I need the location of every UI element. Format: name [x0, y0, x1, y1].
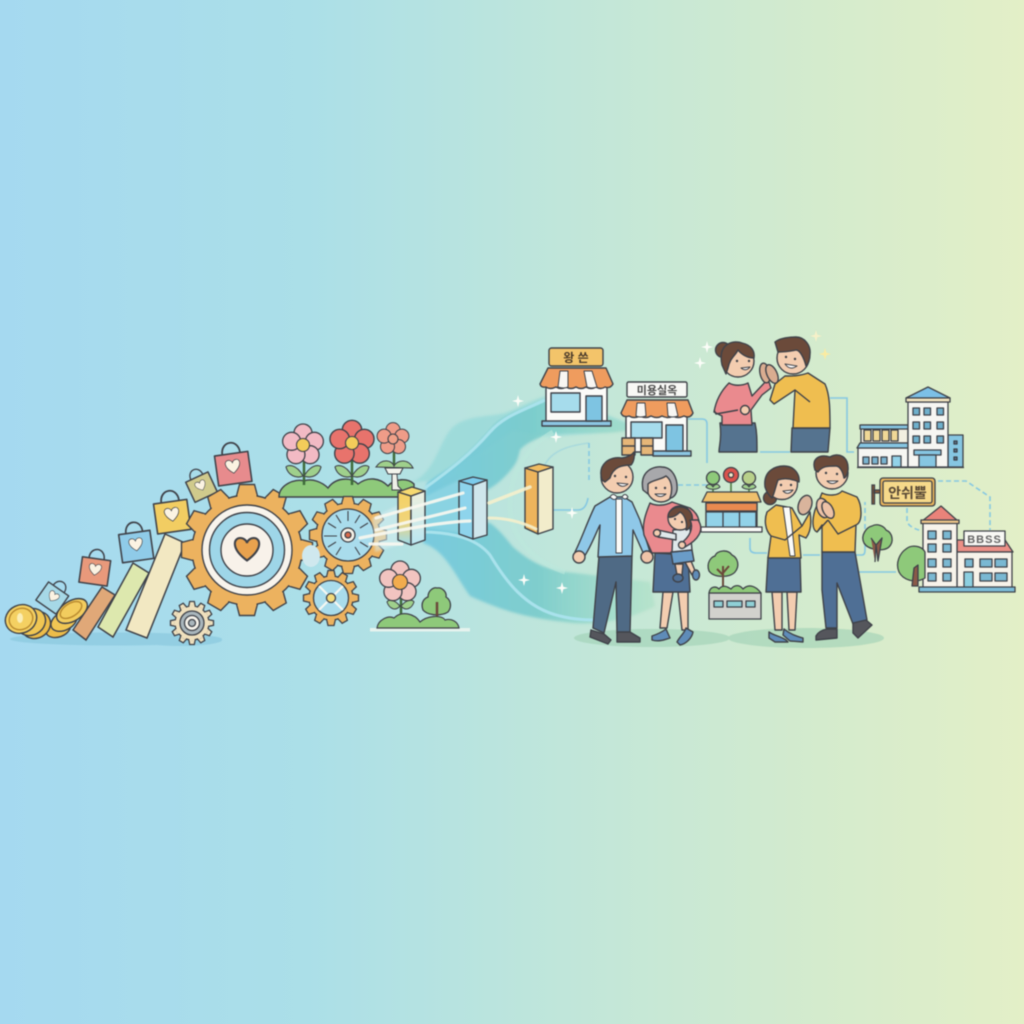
rising bars	[73, 534, 185, 640]
flower: red	[330, 420, 374, 485]
gear: medium spoked	[310, 496, 386, 574]
flower: pink	[283, 424, 323, 485]
shop 1 awning	[540, 368, 613, 388]
coins	[1, 594, 92, 644]
colleagues: woman in yellow jacket	[764, 466, 815, 642]
shopping bags	[36, 441, 252, 614]
light streaks through prisms	[360, 487, 536, 544]
light wash over gear edge	[372, 505, 398, 552]
gear: small	[304, 570, 358, 626]
bag: salmon	[79, 548, 112, 586]
flow: ribbons between gears and community	[413, 396, 655, 623]
building: red roof complex	[919, 506, 1015, 592]
child	[654, 506, 700, 582]
flower shop	[701, 468, 762, 532]
bag: blue small	[36, 575, 73, 614]
flower bed with three flowers	[279, 420, 414, 497]
trees by buildings	[863, 525, 925, 586]
shop 2 awning	[621, 400, 693, 418]
family ground shadows	[574, 628, 884, 648]
couple: high-five woman	[714, 342, 771, 452]
tree 1	[863, 525, 892, 562]
artwork	[1, 330, 1015, 648]
tree 2	[898, 546, 925, 586]
building sign: BBSS	[967, 534, 1002, 546]
connector lines	[540, 398, 990, 572]
gear: tiny beige	[170, 602, 214, 644]
bag: yellow	[152, 489, 191, 534]
ground shadows	[10, 632, 222, 646]
bag: blue	[117, 520, 154, 563]
hanging sign	[872, 478, 935, 506]
flower and tree on lower hill	[370, 561, 470, 632]
family: father	[573, 452, 653, 644]
clapped hands	[758, 362, 781, 385]
shop 1	[540, 348, 613, 426]
prism: orange	[525, 464, 553, 534]
flower: potted salmon	[376, 423, 413, 490]
gear: large with heart	[182, 484, 312, 616]
shop 2 sign: 미용실옥	[637, 384, 677, 397]
shop 2	[621, 382, 693, 456]
family: grandmother holding child	[642, 467, 701, 645]
hanging sign: 안쉬뿔	[888, 485, 927, 501]
pale blob at gear contact	[302, 545, 320, 567]
planter tree on building	[708, 551, 761, 619]
colleagues: man in yellow sweater	[813, 455, 872, 640]
building: blue roof complex	[857, 387, 964, 468]
bag: olive	[182, 465, 217, 502]
bag: red	[213, 441, 252, 486]
prism: yellow	[398, 487, 425, 545]
couple: high-five man	[758, 337, 830, 452]
green hill	[279, 479, 414, 497]
shop 1 sign: 왕 쓴	[563, 351, 589, 365]
sparkles	[512, 330, 831, 594]
prism: blue	[459, 477, 487, 539]
